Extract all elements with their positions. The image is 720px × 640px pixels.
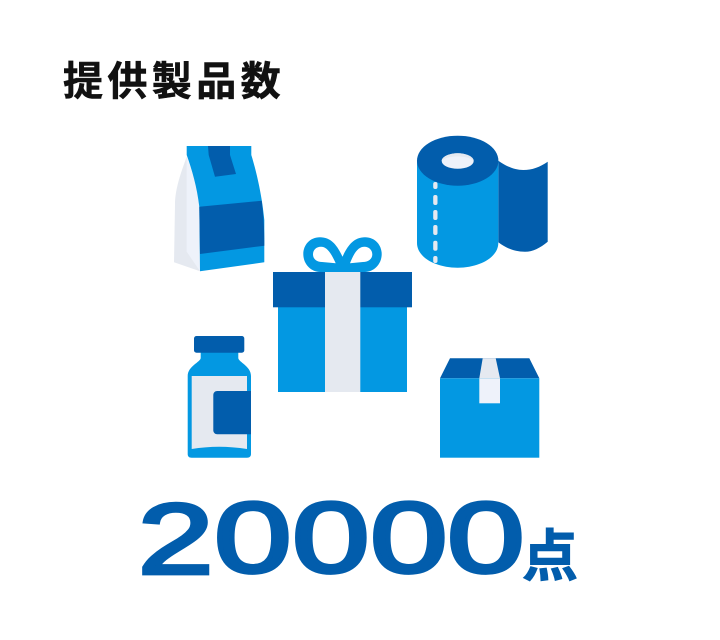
unit label: 点 [522, 525, 578, 588]
icon: pouch bag [174, 146, 264, 271]
big number: 0 [214, 481, 292, 593]
icon: bottle [188, 336, 251, 458]
icon: gift box [273, 237, 412, 392]
big number: 0 [447, 481, 525, 593]
title: 提供製品数 [63, 60, 285, 104]
big number: 2 [138, 484, 214, 595]
icon: paper towel roll [417, 136, 548, 268]
icon: cardboard box [440, 358, 539, 458]
big number: 0 [292, 481, 370, 593]
big number: 0 [370, 481, 448, 593]
big number [138, 481, 525, 595]
